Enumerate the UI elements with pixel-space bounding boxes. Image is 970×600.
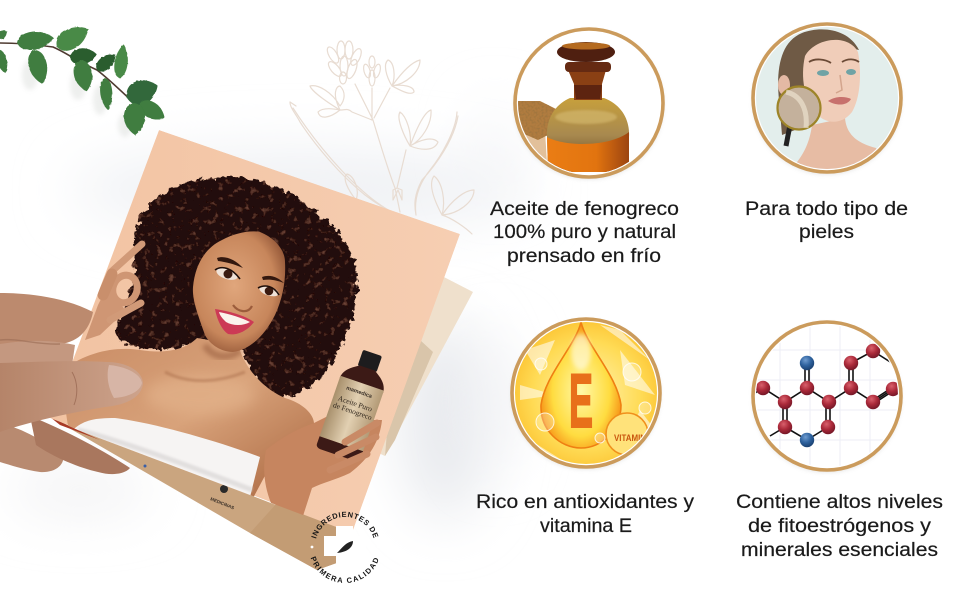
folded tan flap	[50, 417, 353, 570]
ok hand gesture	[85, 244, 142, 340]
line art flower	[290, 41, 474, 234]
feature 1: oil bottle	[490, 29, 679, 267]
caption 1: prensado en frío	[507, 246, 661, 267]
caption 4: de fitoestrógenos y	[748, 516, 932, 537]
circle icon: oil bottle	[515, 29, 663, 180]
caption 2	[745, 199, 908, 243]
small logo print on flap	[144, 464, 235, 510]
holding hand	[0, 293, 143, 474]
feature 4: phytoestrogens	[736, 320, 943, 561]
badge circular text	[310, 512, 378, 583]
caption 3: Rico en antioxidantes y	[476, 492, 695, 513]
circle icon: vitamin E drop	[512, 319, 662, 470]
caption 1: Aceite de fenogreco	[490, 199, 679, 220]
product bottle: mamedica	[345, 385, 373, 400]
caption 1: 100% puro y natural	[493, 222, 676, 243]
feature 2: skin	[745, 24, 908, 243]
circle icon: molecule	[753, 320, 901, 472]
arm	[264, 415, 382, 516]
photo card	[50, 130, 460, 533]
circle icon: vitamin E drop: E	[569, 359, 593, 444]
nose and lips	[215, 305, 254, 334]
fingers on bottle	[334, 420, 380, 462]
towel	[70, 418, 260, 497]
caption 2: pieles	[799, 222, 854, 243]
product bottle	[316, 350, 384, 458]
caption 4: Contiene altos niveles	[736, 492, 943, 513]
shoulders and chest	[60, 338, 314, 500]
small logo print on flap: MEDICINAS	[210, 496, 235, 510]
circle icon: woman with magnifier	[753, 24, 901, 175]
caption 3: vitamina E	[540, 516, 632, 537]
badge circular text: INGREDIENTES DE	[311, 512, 378, 538]
back beige pages	[372, 275, 473, 456]
feature 3: vitamin E	[476, 319, 695, 537]
badge circular text: PRIMERA CALIDAD	[310, 556, 378, 583]
caption 1	[490, 199, 679, 267]
caption 4: minerales esenciales	[741, 540, 938, 561]
badge cross	[324, 526, 366, 568]
product bottle: de Fenogreco	[332, 400, 373, 422]
hair	[115, 177, 357, 397]
caption 2: Para todo tipo de	[745, 199, 908, 220]
badge feather	[337, 541, 353, 553]
quality badge	[310, 512, 378, 583]
caption 3	[476, 492, 695, 537]
face	[193, 231, 285, 352]
leaf branch	[0, 20, 169, 137]
eyes and brows	[215, 257, 284, 298]
product bottle: Aceite Puro	[337, 393, 374, 414]
caption 4	[736, 492, 943, 561]
circle icon: vitamin E drop: VITAMIN	[614, 433, 646, 443]
